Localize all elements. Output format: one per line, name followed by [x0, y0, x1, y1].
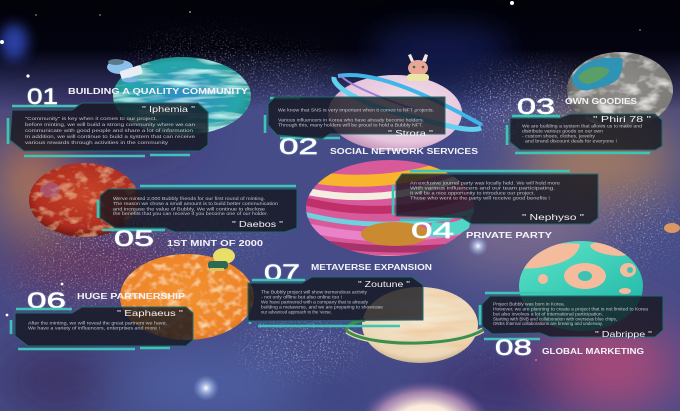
heading 06: HUGE PARTNERSHIP — [77, 292, 186, 301]
text block 08: Project Bubbly was born in Korea. — [493, 302, 565, 306]
text block 05: the benefits that you can receive if you become one of our holder. — [113, 211, 268, 216]
text block 05: and increase the value of Bubbly. We will continue to disclose — [113, 206, 266, 212]
text block 06: We have a variety of influencers, enterprises and more ! — [28, 326, 160, 330]
planet 06: orange world with mascot — [120, 248, 254, 340]
number 07: 07 — [264, 260, 300, 285]
planet 07: cream planet with green ring — [347, 287, 483, 363]
text block 04: Those who went to the party will receive good benefits ! — [410, 196, 550, 200]
heading 02: SOCIAL NETWORK SERVICES — [330, 147, 479, 156]
section 06: huge partnership — [11, 288, 193, 349]
text block 03: We are building a system that allows us to make and — [522, 124, 642, 128]
section 07: metaverse expansion — [248, 260, 432, 326]
section 05: first mint — [98, 186, 297, 251]
text block 07: We have partnered with a company that is already — [261, 300, 369, 304]
planet 02: pink ringed planet with mascot — [328, 54, 482, 151]
text block 07: building a metaverse, and we are preparing to showcase — [261, 304, 383, 310]
text block 08: However, we are planning to create a project that is not limited to Korea — [493, 306, 648, 312]
text block 03: - custom shoes, clothes, jewelry — [522, 134, 596, 138]
heading 01: BUILDING A QUALITY COMMUNITY — [68, 87, 249, 96]
planet 05: red world — [29, 163, 139, 237]
text block 07: - not only offline but also online too ! — [261, 294, 342, 300]
section 03: own goodies — [507, 94, 662, 153]
panel 06 frame — [11, 307, 193, 349]
icon: yellow mascot — [208, 248, 235, 271]
panel 05 frame — [98, 186, 297, 232]
text block 01: before minting, we will build a strong community where we can — [25, 122, 196, 127]
quote author 02: " Strora " — [388, 128, 433, 138]
quote author 07: " Zoutune " — [358, 279, 410, 289]
text block 02: Various influencers in Korea who have already become holders. — [278, 118, 424, 122]
quote author 03: " Phiri 78 " — [593, 114, 651, 124]
text block 05 — [113, 196, 279, 216]
text block 06 — [28, 320, 167, 330]
text block 04: An exclusive journal party was locally held. We will hold more — [410, 180, 561, 186]
text block 02: Through this, many holders will be proud to hold a Bubbly NFT. — [278, 122, 423, 128]
text block 04: With various influencers and our team participating. — [410, 186, 555, 190]
text block 01: communicate with good people and share a lot of information — [25, 128, 194, 133]
quote author 06: " Eaphaeus " — [117, 308, 183, 318]
panel 04 frame — [393, 171, 598, 224]
text block 08: ONEs Internal collaborations are brewing and underway. — [493, 321, 603, 326]
panel 03 frame — [507, 114, 662, 153]
icon: blue mascot — [107, 59, 143, 82]
quote author 04: " Nephyso " — [522, 212, 584, 222]
planet 01: teal world with mascot — [107, 57, 251, 135]
text block 07 — [261, 290, 383, 314]
text block 07: our advanced approach to the 'verse. — [261, 310, 332, 314]
text block 02 — [278, 108, 434, 128]
quote author 08: " Dabrippe " — [595, 329, 652, 339]
section 04: private party — [393, 171, 598, 243]
text block 03: and brand discount deals for everyone ! — [525, 138, 617, 144]
section 08: global marketing — [480, 293, 663, 360]
text block 01 — [25, 116, 196, 145]
panel 02 frame — [265, 97, 445, 139]
number 05: 05 — [114, 226, 154, 251]
text block 03 — [522, 124, 642, 144]
glowing sun at bottom edge — [362, 381, 488, 411]
text block 05: We've minted 2,000 Bubbly friends for our first round of minting. — [113, 196, 265, 201]
text block 01: various rewards through activities in the community — [25, 140, 169, 145]
number 06: 06 — [27, 288, 66, 313]
quote author 01: " Iphemia " — [142, 104, 195, 114]
text block 08 — [493, 302, 648, 326]
planet 08: mint planet with coral craters — [519, 240, 643, 331]
panel 01 frame — [8, 103, 208, 156]
number 08: 08 — [495, 335, 532, 360]
planet 03: grey moon with teal patch — [567, 52, 673, 128]
text block 04: It will be a nice opportunity to introduce our project. — [410, 190, 535, 196]
text block 08: but also involves a lot of international participation. — [493, 312, 603, 316]
planet 04: striped world — [306, 160, 474, 256]
text block 06: After the minting, we will reveal the great partners we have. — [28, 320, 167, 326]
text block 01: In addition, we will continue to build a system that can receive — [25, 134, 196, 139]
section 02: social network services — [265, 97, 479, 159]
panel 07 frame — [248, 277, 423, 326]
text block 07: The Bubbly project will show tremendous activity — [261, 290, 368, 294]
text block 02: We know that SNS is very important when it comes to NFT projects. — [278, 108, 434, 112]
heading 04: PRIVATE PARTY — [466, 231, 553, 240]
panel 08 frame — [480, 293, 663, 339]
quote author 05: " Daebos " — [232, 219, 283, 229]
text block 01: "Community" is key when it comes to our project. — [25, 116, 157, 121]
heading 03: OWN GOODIES — [565, 97, 638, 106]
number 02: 02 — [279, 134, 318, 159]
text block 05: The reason we chose a small amount is to build better communication — [113, 201, 279, 206]
number 01: 01 — [27, 84, 58, 109]
icon: pink bunny mascot — [407, 54, 429, 81]
text block 04 — [410, 180, 561, 200]
number 03: 03 — [517, 94, 555, 119]
heading 05: 1ST MINT OF 2000 — [167, 239, 264, 248]
heading 08: GLOBAL MARKETING — [542, 347, 644, 356]
text block 08: Starting with BNB and collaboration with overseas blue chips, — [493, 316, 617, 322]
heading 07: METAVERSE EXPANSION — [311, 263, 432, 272]
section 01: building a quality community — [8, 84, 249, 156]
number 04: 04 — [411, 218, 454, 243]
text block 03: distribute various goods on our own — [522, 128, 603, 134]
